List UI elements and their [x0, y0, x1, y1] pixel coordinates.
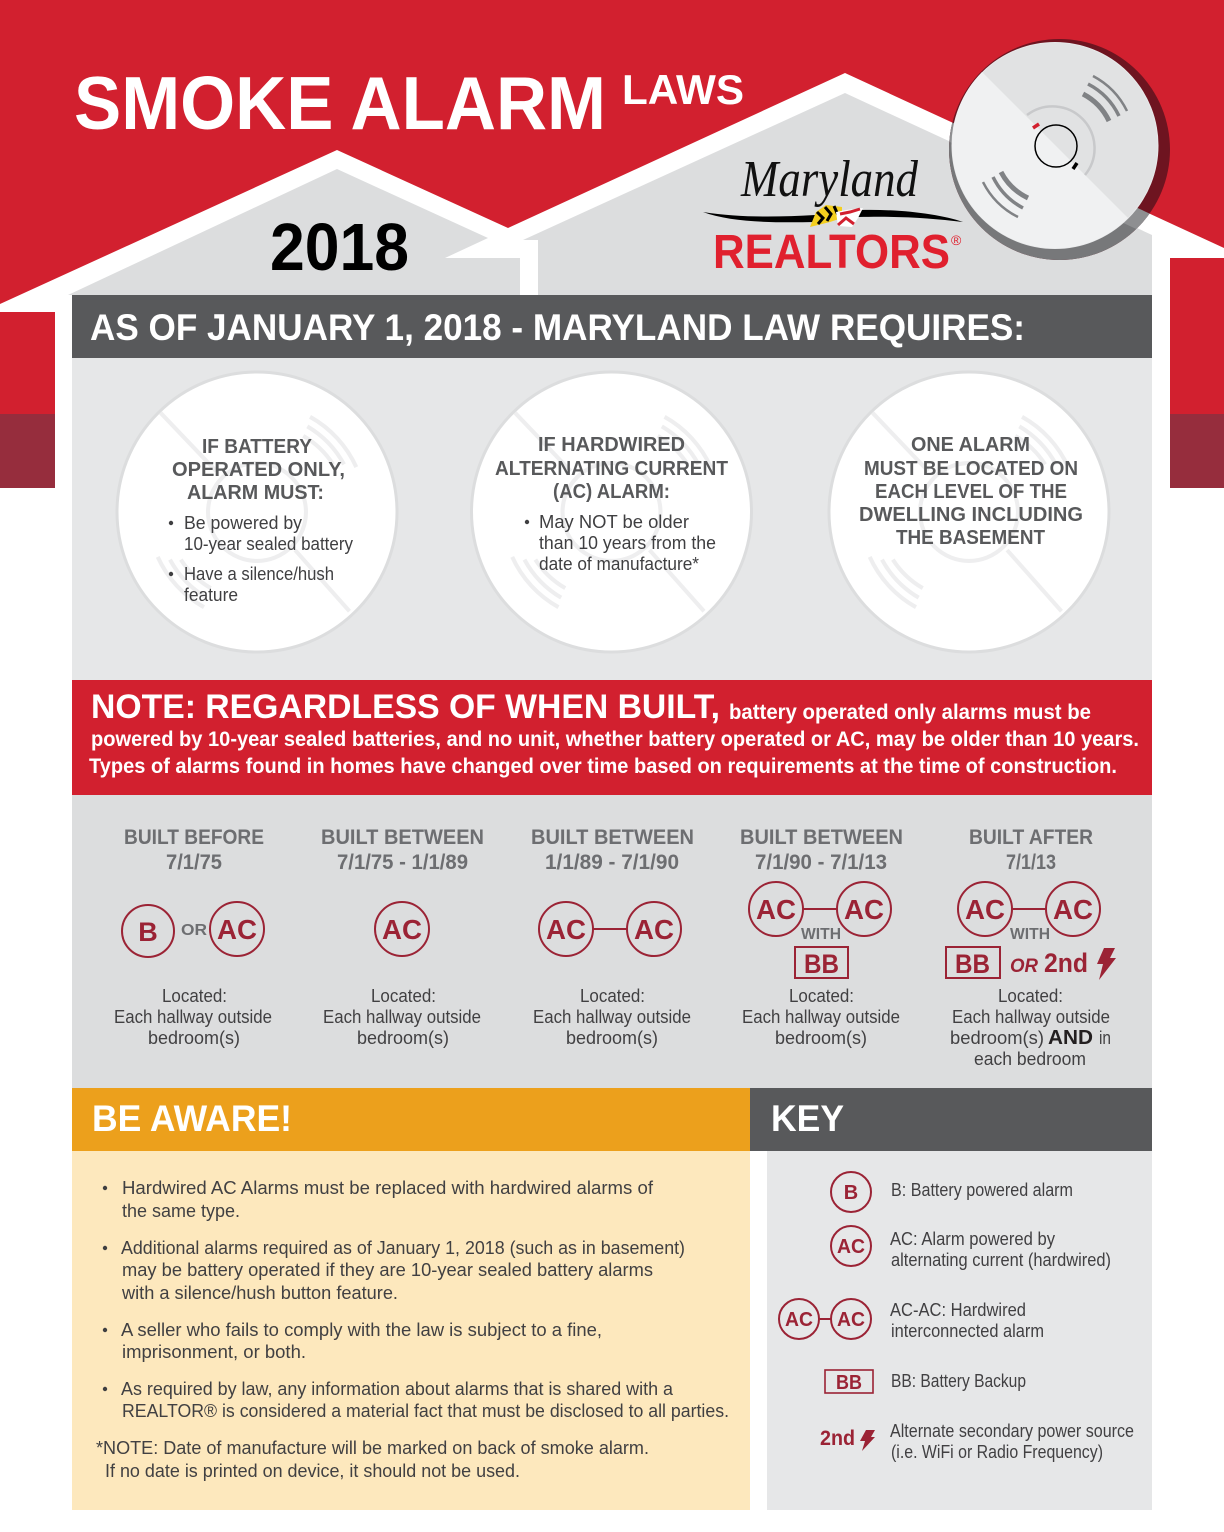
column: built 7/1/75 - 1/1/89: Located:	[371, 986, 436, 1006]
column: built after 7/1/13: OR	[1010, 956, 1038, 977]
heading: key: KEY	[771, 1098, 844, 1139]
key item: AC: AC	[837, 1236, 865, 1258]
heading: be aware	[72, 1088, 750, 1151]
panel: be aware list: may be battery operated if they are 10-year sealed battery alarms	[122, 1260, 653, 1280]
column: built 7/1/90 - 7/1/13: BB	[804, 949, 839, 979]
column: built before 7/1/75: Located:	[162, 986, 227, 1006]
panel: be aware list	[72, 1151, 750, 1510]
house: right grey gable	[523, 93, 1152, 295]
column: built after 7/1/13: Each hallway outside	[952, 1007, 1110, 1027]
requirement circle: one alarm per level: DWELLING INCLUDING	[859, 504, 1083, 526]
heading: be aware: BE AWARE!	[92, 1098, 292, 1139]
requirement circle: one alarm per level: EACH LEVEL OF THE	[875, 481, 1067, 503]
panel: be aware list: the same type.	[122, 1201, 240, 1221]
requirement circle: hardwired AC: date of manufacture*	[539, 554, 699, 574]
key item: battery	[831, 1172, 1073, 1212]
column: built 7/1/90 - 7/1/13: WITH	[801, 926, 841, 943]
column: built 7/1/75 - 1/1/89: bedroom(s)	[357, 1028, 449, 1048]
panel: be aware list: with a silence/hush button feature.	[121, 1283, 398, 1303]
column: built before 7/1/75: Each hallway outside	[114, 1007, 272, 1027]
banner: as of January 1, 2018	[72, 295, 1152, 358]
logo: Maryland Realtors: REALTORS	[713, 226, 950, 279]
column: built after 7/1/13	[946, 826, 1116, 1069]
key item: interconnected	[779, 1299, 1044, 1341]
key item: AC: AC: Alarm powered by	[890, 1229, 1055, 1249]
requirement circle: hardwired AC: IF HARDWIRED	[538, 434, 685, 456]
column: built 1/1/89 - 7/1/90: Each hallway outside	[533, 1007, 691, 1027]
icon: smoke alarm	[949, 39, 1170, 260]
column: built after 7/1/13: Located:	[998, 986, 1063, 1006]
key item: secondary power: 2nd	[820, 1427, 855, 1450]
column: built 1/1/89 - 7/1/90: bedroom(s)	[566, 1028, 658, 1048]
column: built 7/1/90 - 7/1/13: 7/1/90 - 7/1/13	[755, 851, 887, 874]
column: built 7/1/90 - 7/1/13: Located:	[789, 986, 854, 1006]
column: built 7/1/90 - 7/1/13: AC	[844, 894, 884, 925]
panel: be aware list: As required by law, any information about alarms that is shared with a	[121, 1379, 674, 1399]
requirement circle: battery operated: Be powered by	[184, 513, 302, 533]
key item: battery backup: BB: Battery Backup	[891, 1371, 1026, 1391]
column: built after 7/1/13: BB	[955, 949, 990, 979]
year: 2018	[270, 210, 409, 285]
house: left grey gable	[68, 169, 520, 295]
key item: battery: B: Battery powered alarm	[891, 1180, 1073, 1200]
logo: Maryland Realtors: ®	[951, 232, 962, 248]
header: red roof background	[0, 0, 1224, 304]
column: built before 7/1/75	[114, 826, 272, 1048]
requirement circle: hardwired AC: ALTERNATING CURRENT	[495, 458, 728, 480]
column: built 1/1/89 - 7/1/90	[531, 826, 694, 1048]
column: built after 7/1/13: bedroom(s)	[950, 1028, 1044, 1048]
key item: interconnected: AC-AC: Hardwired	[890, 1300, 1026, 1320]
panel: key	[767, 1151, 1152, 1510]
column: built after 7/1/13: 7/1/13	[1006, 851, 1056, 874]
requirement circle: battery operated	[117, 372, 397, 652]
requirement circle: battery operated: OPERATED ONLY,	[172, 459, 345, 481]
column: built before 7/1/75: 7/1/75	[166, 851, 222, 874]
requirement circle: one alarm per level: MUST BE LOCATED ON	[864, 458, 1078, 480]
column: built 7/1/75 - 1/1/89: Each hallway outside	[323, 1007, 481, 1027]
requirement circle: hardwired AC: (AC) ALARM:	[553, 481, 670, 503]
key item: AC	[831, 1226, 1111, 1270]
column: built before 7/1/75: B	[138, 917, 158, 947]
panel: be aware list: imprisonment, or both.	[122, 1342, 306, 1362]
note banner: NOTE: REGARDLESS OF WHEN BUILT,	[91, 688, 720, 726]
requirement circle: battery operated: IF BATTERY	[202, 436, 313, 458]
column: built before 7/1/75: OR	[181, 922, 207, 939]
note banner: battery operated only alarms must be	[729, 701, 1091, 724]
column: built 7/1/75 - 1/1/89: BUILT BETWEEN	[321, 826, 484, 849]
key item: secondary power: Alternate secondary power source	[890, 1421, 1134, 1441]
column: built after 7/1/13: BUILT AFTER	[969, 826, 1093, 849]
note banner	[72, 680, 1152, 795]
column: built 1/1/89 - 7/1/90: Located:	[580, 986, 645, 1006]
note banner: Types of alarms found in homes have changed over time based on requirements at the time of construction.	[89, 755, 1117, 778]
key item: interconnected: interconnected alarm	[891, 1321, 1044, 1341]
key item: secondary power: (i.e. WiFi or Radio Frequency)	[891, 1442, 1103, 1462]
column: built 1/1/89 - 7/1/90: AC	[634, 914, 674, 945]
panel: be aware list: *NOTE: Date of manufacture will be marked on back of smoke alarm.	[96, 1438, 649, 1458]
column: built 7/1/90 - 7/1/13: Each hallway outside	[742, 1007, 900, 1027]
column: built before 7/1/75: bedroom(s)	[148, 1028, 240, 1048]
logo: Maryland Realtors	[703, 151, 963, 279]
column: built after 7/1/13: AC	[965, 894, 1005, 925]
heading: key	[750, 1088, 1152, 1151]
column: built 1/1/89 - 7/1/90: AC	[546, 914, 586, 945]
column: built 7/1/90 - 7/1/13: bedroom(s)	[775, 1028, 867, 1048]
column: built after 7/1/13: AND	[1048, 1027, 1093, 1049]
panel: alarm types by construction date	[72, 795, 1152, 1088]
requirement circle: one alarm per level	[829, 372, 1109, 652]
note banner: powered by 10-year sealed batteries, and no unit, whether battery operated or AC, may be older than 10 years.	[91, 728, 1139, 751]
side block: left red wall	[0, 312, 55, 488]
column: built 7/1/75 - 1/1/89	[321, 826, 484, 1048]
key item: battery: B	[844, 1182, 858, 1204]
column: built after 7/1/13: 2nd	[1044, 948, 1088, 978]
panel: requirements	[72, 358, 1152, 680]
panel: be aware list: Additional alarms required as of January 1, 2018 (such as in basement)	[121, 1238, 685, 1258]
side block: right red wall	[1170, 258, 1224, 488]
column: built 7/1/75 - 1/1/89: 7/1/75 - 1/1/89	[337, 851, 468, 874]
column: built 7/1/90 - 7/1/13: AC	[756, 894, 796, 925]
title: SMOKE ALARM	[74, 61, 606, 145]
panel: be aware list: REALTOR® is considered a material fact that must be disclosed to all parties.	[122, 1401, 729, 1421]
key item: interconnected: AC	[785, 1309, 813, 1331]
column: built after 7/1/13: each bedroom	[974, 1049, 1086, 1069]
column: built before 7/1/75: AC	[217, 914, 257, 945]
requirement circle: one alarm per level: THE BASEMENT	[896, 527, 1045, 549]
panel: be aware list: If no date is printed on device, it should not be used.	[105, 1461, 520, 1481]
banner: as of January 1, 2018: AS OF JANUARY 1, 2018 - MARYLAND LAW REQUIRES:	[90, 307, 1025, 348]
logo: Maryland Realtors: Maryland	[740, 151, 919, 208]
requirement circle: battery operated: Have a silence/hush	[184, 564, 334, 584]
panel: be aware list: A seller who fails to comply with the law is subject to a fine,	[121, 1320, 602, 1340]
key item: battery backup	[825, 1370, 1026, 1394]
column: built 7/1/75 - 1/1/89: AC	[382, 914, 422, 945]
key item: battery backup: BB	[836, 1372, 862, 1394]
requirement circle: battery operated: ALARM MUST:	[187, 482, 324, 504]
panel: be aware list: Hardwired AC Alarms must be replaced with hardwired alarms of	[122, 1178, 654, 1198]
requirement circle: hardwired AC: than 10 years from the	[539, 533, 716, 553]
column: built 7/1/90 - 7/1/13	[740, 826, 903, 1048]
key item: secondary power	[820, 1421, 1134, 1462]
requirement circle: battery operated: 10-year sealed battery	[184, 534, 353, 554]
requirement circle: battery operated: feature	[184, 585, 238, 605]
column: built before 7/1/75: BUILT BEFORE	[124, 826, 264, 849]
column: built after 7/1/13: AC	[1053, 894, 1093, 925]
key item: AC: alternating current (hardwired)	[891, 1250, 1111, 1270]
column: built after 7/1/13: WITH	[1010, 926, 1050, 943]
requirement circle: hardwired AC	[472, 372, 752, 652]
title: LAWS	[622, 66, 744, 113]
requirement circle: hardwired AC: May NOT be older	[539, 512, 689, 532]
column: built after 7/1/13: in	[1099, 1028, 1111, 1048]
requirement circle: one alarm per level: ONE ALARM	[911, 434, 1030, 456]
column: built 7/1/90 - 7/1/13: BUILT BETWEEN	[740, 826, 903, 849]
column: built 1/1/89 - 7/1/90: 1/1/89 - 7/1/90	[545, 851, 679, 874]
key item: interconnected: AC	[837, 1309, 865, 1331]
column: built 1/1/89 - 7/1/90: BUILT BETWEEN	[531, 826, 694, 849]
